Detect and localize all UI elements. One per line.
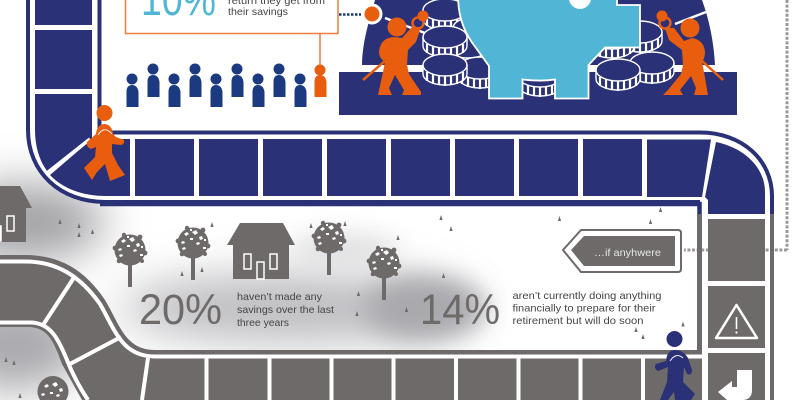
callout text second line: their savings [228, 6, 288, 18]
road dividers [43, 276, 643, 400]
icon: warning triangle [716, 305, 757, 338]
orange person [314, 64, 326, 97]
corner white divider [47, 139, 90, 173]
road fill [0, 255, 702, 400]
stat: 14 percent: 14% [420, 286, 500, 334]
icon: house left [0, 186, 32, 242]
outer right edge [770, 214, 774, 400]
stat text: financially to prepare for their [512, 302, 656, 314]
grey board road [0, 255, 708, 400]
dotted connector line [684, 0, 787, 250]
tree [113, 233, 147, 287]
road outer edge [28, 0, 700, 202]
dotted link [339, 13, 361, 16]
icon: return arrow [718, 370, 752, 400]
dome light lines [385, 12, 706, 33]
piggy eye [569, 0, 591, 9]
panel corner edge [100, 204, 700, 214]
callout box [126, 0, 338, 34]
coin stacks [423, 0, 674, 97]
road cells column [35, 0, 92, 171]
platform [339, 72, 737, 115]
navy board road [28, 0, 772, 214]
stat text: aren’t currently doing anything [512, 290, 662, 302]
dome [362, 0, 715, 65]
stat: 20 percent: 20% [139, 286, 222, 334]
road inner edge [100, 0, 772, 214]
tag label: …if anyhwere [594, 247, 661, 259]
callout connector [319, 33, 321, 65]
grey shaded background [0, 184, 487, 390]
stat: 20 percent [139, 286, 334, 334]
stat text: three years [237, 317, 289, 329]
road white base [28, 0, 772, 214]
stat text: retirement but will do soon [512, 315, 644, 327]
tree [367, 246, 401, 300]
corner cell right [705, 142, 765, 214]
right end of row [703, 354, 708, 400]
panel right edge [697, 214, 702, 353]
tree [312, 221, 346, 275]
road cells row [135, 139, 711, 197]
orange marker [363, 5, 381, 23]
stat: 14 percent [420, 286, 662, 334]
grey column cells [708, 219, 765, 400]
tag: if anywhere [563, 230, 681, 272]
tree clipped at bottom [38, 376, 68, 400]
stat text [512, 290, 662, 327]
left worker [363, 10, 428, 95]
white road lines [0, 262, 702, 356]
piggy bank scene [339, 0, 737, 115]
stat text: haven’t made any [237, 291, 323, 303]
row of people [126, 64, 326, 107]
corner cell left [50, 139, 130, 196]
stat text: savings over the last [237, 304, 334, 316]
right worker [656, 10, 723, 95]
navy walker [655, 331, 695, 400]
orange walker [84, 105, 125, 181]
stat text [237, 291, 334, 329]
scattered small markers [4, 207, 685, 398]
icon: house [227, 223, 295, 279]
piggy bank [458, 0, 640, 98]
tree [176, 226, 210, 280]
